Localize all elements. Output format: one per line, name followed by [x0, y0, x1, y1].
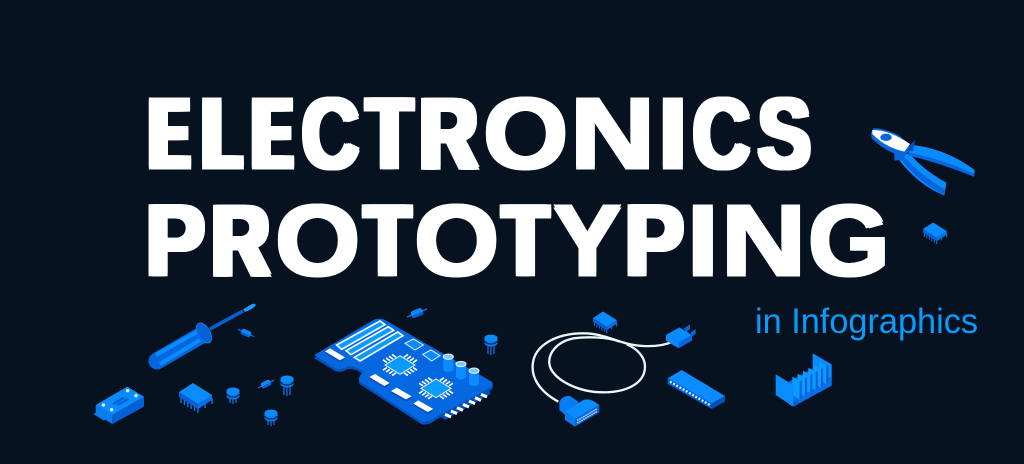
icon: transistor small — [226, 388, 240, 404]
icon: resistor above board — [406, 306, 428, 320]
title: I — [687, 185, 718, 297]
icon: circuit board — [314, 319, 493, 425]
title: O — [414, 185, 499, 297]
title: C — [300, 78, 357, 190]
title: L — [199, 78, 236, 190]
icon: transistor right — [280, 376, 294, 396]
icon: pliers — [871, 128, 975, 196]
icon: dip chip top — [593, 312, 617, 333]
title — [144, 78, 889, 297]
icon: dip chip under pliers — [923, 223, 947, 244]
title: T — [500, 185, 545, 297]
icon: resistor upper — [237, 327, 255, 339]
title: T — [364, 78, 408, 190]
icon: dip chip left — [179, 383, 212, 413]
icon: screwdriver — [156, 304, 256, 364]
icon: transistor bottom — [264, 410, 278, 426]
title: R — [209, 185, 267, 297]
icon: resistor lower — [257, 377, 275, 391]
icon: transistor beside board — [484, 334, 498, 355]
title: C — [691, 78, 749, 190]
title: S — [756, 78, 809, 190]
title: P — [144, 185, 203, 297]
title: G — [808, 185, 889, 297]
title: Y — [553, 185, 622, 297]
title: O — [483, 78, 568, 190]
icon: pin header strip — [668, 370, 725, 409]
title: O — [275, 185, 360, 297]
title: E — [146, 78, 183, 190]
icon: heat sink — [776, 353, 832, 407]
title: N — [570, 78, 655, 190]
title: T — [362, 185, 406, 297]
title: R — [417, 78, 475, 190]
title: N — [721, 185, 806, 297]
subtitle: in Infographics — [755, 302, 978, 341]
icon: usb drive — [93, 387, 144, 424]
title: E — [249, 78, 286, 190]
title: P — [623, 185, 682, 297]
title: I — [657, 78, 688, 190]
icon: cable with plug and connector — [533, 324, 696, 427]
